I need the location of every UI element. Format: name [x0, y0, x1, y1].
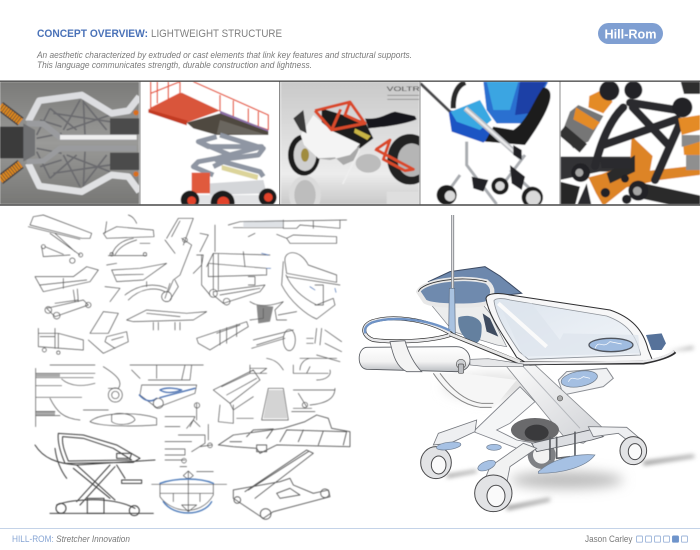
title: CONCEPT OVERVIEW: [37, 28, 148, 40]
head end cushion [646, 333, 666, 350]
cross bar [532, 430, 603, 460]
sketch: structural mesh [250, 302, 297, 323]
base column A [507, 365, 603, 443]
head cushion [428, 267, 522, 297]
sketch: chair concept [282, 253, 340, 319]
iv pole [449, 215, 455, 335]
motor [511, 418, 559, 469]
subtitle: LIGHTWEIGHT STRUCTURE [151, 28, 282, 40]
left rail loop [364, 318, 523, 364]
sketch: curved handle [292, 388, 335, 412]
base column B [473, 387, 535, 453]
sketch: rail detail [213, 370, 260, 423]
front leg [483, 443, 537, 483]
photo: baby stroller [420, 82, 560, 208]
sketch: top fragments [250, 365, 330, 380]
sketch: box stretcher [38, 328, 83, 354]
description [36, 50, 412, 70]
lower side rail [520, 351, 675, 363]
shadows [443, 347, 695, 510]
sketch: pedestal base [233, 450, 330, 519]
concept sketches [28, 215, 350, 519]
sketch: frame detail [165, 218, 208, 300]
sketch: mechanism details [165, 403, 212, 467]
foot pedals [436, 441, 595, 473]
sketch: side rail [127, 310, 207, 330]
side roll [359, 341, 523, 373]
photo: scissor lift [148, 82, 278, 204]
photo: Voltra motorcycle [280, 82, 420, 204]
side panel with signature [558, 368, 613, 395]
sketch: panel with base [88, 312, 128, 353]
footer rule [0, 528, 700, 529]
sketch: bunk concept [202, 225, 271, 305]
sketch: capsule plan [83, 410, 157, 426]
right rear leg [588, 427, 642, 445]
photo: orange suspension frame [560, 81, 700, 206]
sketch: section detail [36, 365, 95, 427]
sketch: clamp detail [252, 329, 295, 351]
photo strip [0, 80, 700, 215]
sketch: textured mattress [262, 388, 288, 420]
sketch: side-view concept [35, 433, 155, 516]
sketch: caster wheel [103, 367, 122, 402]
sketch: small rail section [250, 355, 340, 370]
sketch: side stretcher [103, 215, 154, 256]
head frame [418, 279, 507, 347]
sketch: top stretcher [218, 415, 350, 453]
author: Jason Carley [585, 534, 633, 544]
sketch: bunk lower [130, 365, 203, 408]
sketch: front view [152, 471, 227, 513]
main stretcher rendering [359, 215, 695, 512]
sketch: angled bed [35, 267, 98, 319]
casters [421, 437, 647, 512]
description: An aesthetic characterized by extruded or cast elements that link key features and structural supports. [36, 50, 412, 60]
sketch: long rail [228, 220, 347, 243]
photo: lightweight chassis [0, 82, 139, 204]
sketch: tilted stretcher [28, 215, 92, 263]
sketch: mattress with rails [197, 322, 248, 350]
photo: Voltra motorcycle: VOLTRA [387, 86, 428, 93]
main frame [486, 294, 653, 365]
left rear leg [433, 420, 477, 445]
lower support arm [433, 373, 517, 408]
logo: Hill-Rom [598, 23, 663, 44]
logo: Hill-Rom: Hill-Rom [604, 26, 656, 42]
description: This language communicates strength, durable construction and lightness. [37, 60, 312, 70]
footer title: HILL-ROM: Stretcher Innovation [12, 534, 130, 544]
page indicator [636, 536, 688, 542]
sketch: rail bend [307, 328, 342, 352]
sketch: flat bed with arcs [105, 263, 172, 302]
